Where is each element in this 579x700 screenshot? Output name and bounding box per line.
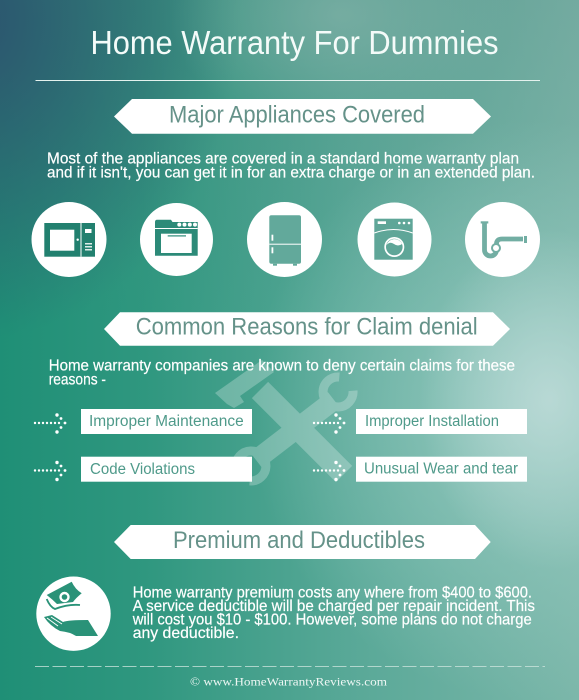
- text: premium details: will cost you $10 - $100. However, some plans do not charge: [132, 612, 532, 629]
- callout: improper installation: [356, 409, 527, 434]
- icon: refrigerator: [247, 202, 322, 277]
- text: claim intro: [49, 358, 515, 388]
- banner: major appliances: Major Appliances Covered: [169, 102, 425, 129]
- banner: claim denial: Common Reasons for Claim denial: [136, 314, 478, 341]
- icon: crossed tools watermark: [215, 360, 353, 481]
- text: premium details: any deductible.: [133, 625, 239, 642]
- text: appliances intro: Most of the appliances are covered in a standard home warranty plan: [47, 150, 519, 167]
- text: appliances intro: [47, 150, 535, 181]
- arrow: row 2 left: [34, 461, 66, 481]
- arrow: row 2 right: [313, 461, 345, 481]
- callout: improper maintenance: Improper Maintenance: [89, 413, 244, 430]
- text: claim intro: Home warranty companies are known to deny certain claims for these: [49, 358, 515, 375]
- icon: washing machine: [358, 202, 432, 276]
- arrow: row 1 left: [34, 413, 66, 434]
- text: premium details: A service deductible will be charged per repair incident. This: [133, 598, 535, 615]
- callout: improper maintenance: [81, 409, 252, 434]
- banner: major appliances: [114, 99, 491, 134]
- banner: premium: [114, 525, 491, 559]
- icon: microwave: [32, 202, 106, 277]
- callout: unusual wear and tear: [356, 457, 527, 482]
- text: appliances intro: and if it isn't, you can get it in for an extra charge or in an extended plan.: [47, 164, 535, 181]
- text: premium details: Home warranty premium costs any where from $400 to $600.: [133, 585, 532, 602]
- arrow: row 1 right: [313, 413, 345, 434]
- callout: code violations: [81, 457, 252, 482]
- icon: money in hand: [36, 576, 111, 651]
- section: claim denial: [34, 312, 527, 482]
- footer: website credit: © www.HomeWarrantyReviews.com: [190, 677, 387, 689]
- icon: oven: [140, 203, 213, 276]
- text: claim intro: reasons -: [49, 371, 106, 388]
- icon: pipe: [465, 202, 540, 277]
- callout: code violations: Code Violations: [90, 461, 195, 478]
- text: premium details: [132, 585, 535, 642]
- callout: improper installation: Improper Installation: [365, 413, 499, 430]
- section: appliances: [32, 99, 540, 277]
- title: Home Warranty For Dummies: [90, 24, 498, 61]
- callout: unusual wear and tear: Unusual Wear and tear: [364, 460, 518, 477]
- section: premium and deductibles: [36, 525, 535, 651]
- banner: premium: Premium and Deductibles: [173, 527, 425, 554]
